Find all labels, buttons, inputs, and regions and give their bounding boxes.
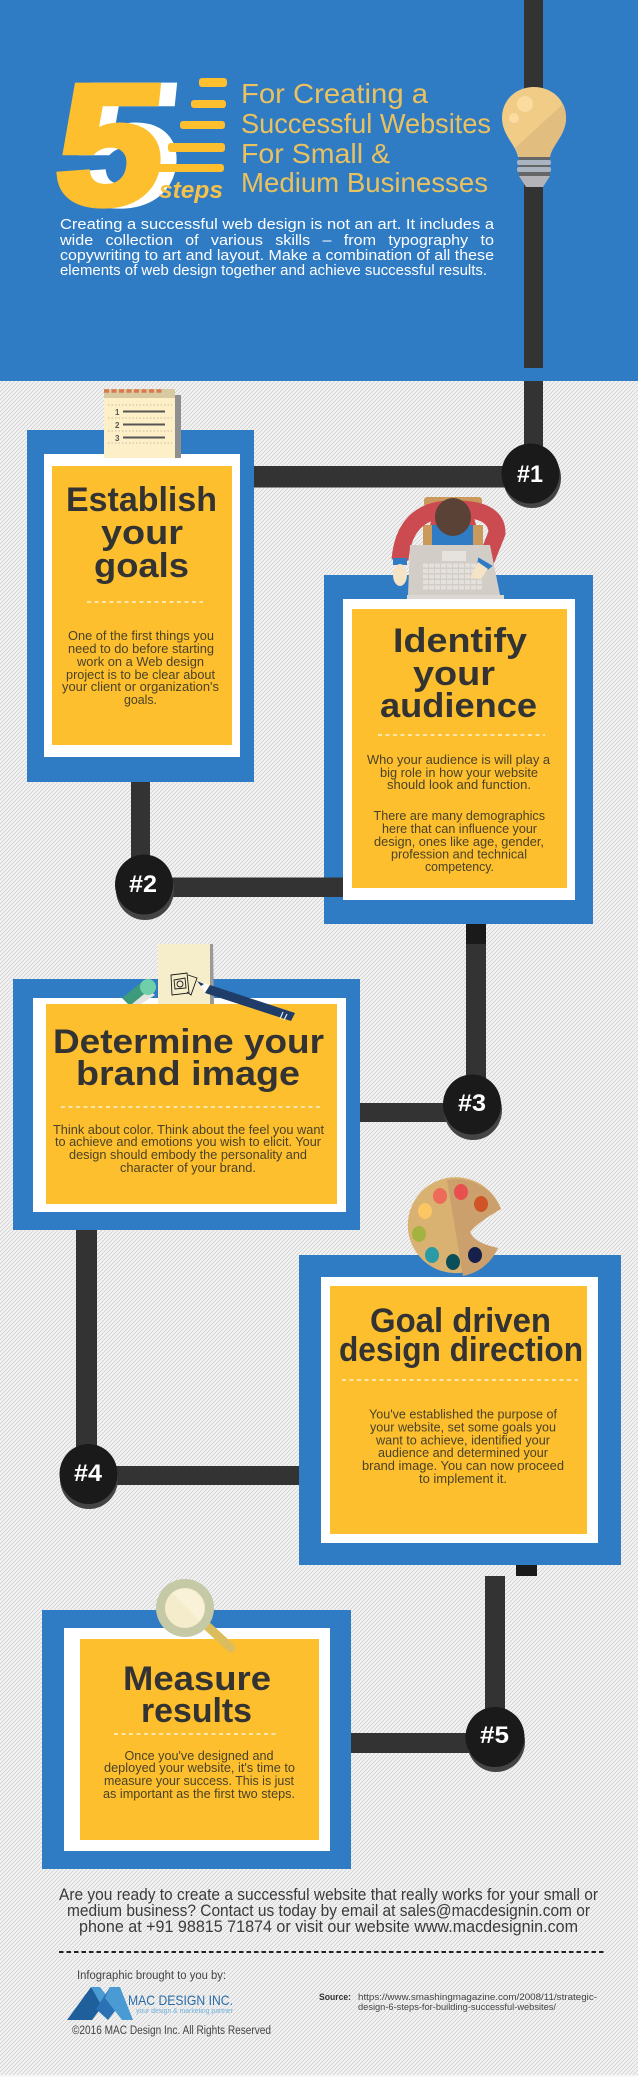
body text: goals. <box>124 693 157 707</box>
badge: #3 <box>443 1074 502 1140</box>
body text: big role in how your website <box>380 766 538 780</box>
body text: to achieve and emotions you wish to elicit. Your <box>55 1135 321 1149</box>
body text: your client or organization's <box>62 680 219 694</box>
logo: mac design: MAC DESIGN INC. <box>128 1992 233 2008</box>
body text: want to achieve, identified your <box>375 1434 550 1448</box>
big number 5 steps: steps <box>159 177 223 204</box>
body text: project is to be clear about <box>66 668 216 682</box>
source: Source: <box>319 1992 351 2003</box>
body text: character of your brand. <box>120 1161 256 1175</box>
title: Medium Businesses <box>241 167 488 198</box>
title <box>241 78 491 198</box>
copyright: ©2016 MAC Design Inc. All Rights Reserved <box>72 2025 271 2037</box>
heading: design direction <box>339 1331 583 1369</box>
heading: Establish <box>66 481 217 519</box>
body text: your website, set some goals you <box>370 1420 556 1434</box>
call to action text: Are you ready to create a successful website that really works for your small or <box>59 1886 598 1904</box>
logo: mac design <box>67 1987 234 2020</box>
intro text: wide collection of various skills – from typography to <box>59 233 494 249</box>
heading: Identify <box>393 622 527 660</box>
badge: #2 <box>115 854 174 920</box>
body text: should look and function. <box>387 778 531 792</box>
body text: measure your success. This is just <box>104 1774 295 1788</box>
call to action text: phone at +91 98815 71874 or visit our website www.macdesignin.com <box>79 1918 578 1936</box>
connector: step 5 <box>351 1565 537 1753</box>
source: design-6-steps-for-building-successful-websites/ <box>358 2002 556 2013</box>
heading <box>123 1660 271 1730</box>
body text: One of the first things you <box>68 629 214 643</box>
icon: lightbulb <box>502 87 566 187</box>
body text: There are many demographics <box>374 809 545 823</box>
panel: step 4 goal driven design direction <box>299 1255 621 1565</box>
body text: profession and technical <box>391 848 527 862</box>
title: For Creating a <box>241 78 428 109</box>
connector: step 1 <box>254 381 543 488</box>
intro text <box>59 217 495 279</box>
heading: Goal driven <box>370 1302 551 1340</box>
icon: magnifying glass <box>156 1579 231 1648</box>
body text: to implement it. <box>419 1472 507 1486</box>
body text <box>367 753 550 874</box>
icon: paper, eraser and pencil <box>122 944 295 1021</box>
body text: design should embody the personality and <box>69 1148 307 1162</box>
connector: step 4 <box>76 1230 299 1485</box>
badge: #1: #1 <box>517 461 543 488</box>
heading: Measure <box>123 1660 271 1698</box>
body text: work on a Web design <box>76 655 204 669</box>
panel: step 5 measure results <box>42 1610 351 1869</box>
heading: brand image <box>76 1055 300 1093</box>
source: https://www.smashingmagazine.com/2008/11/strategic- <box>358 1992 597 2003</box>
icon: notepad checklist: 3 <box>115 434 120 443</box>
body text: You've established the purpose of <box>369 1408 558 1422</box>
body text <box>103 1749 295 1801</box>
heading: Determine your <box>53 1023 324 1061</box>
body text: here that can influence your <box>382 822 537 836</box>
panel: step 1 establish your goals <box>27 430 254 782</box>
heading: your <box>413 655 495 693</box>
heading <box>339 1302 583 1369</box>
call to action text <box>59 1886 598 1936</box>
heading <box>66 481 217 585</box>
heading: your <box>101 514 183 552</box>
credit: brought to you by: Infographic brought to you by: <box>77 1970 226 1982</box>
heading: audience <box>380 687 537 725</box>
body text <box>362 1408 564 1486</box>
panel: header <box>0 0 638 381</box>
body text <box>53 1123 325 1175</box>
title: For Small & <box>241 138 390 169</box>
body text: competency. <box>425 860 494 874</box>
big number 5 steps: 5 <box>63 48 191 241</box>
icon: pictures sketch <box>171 973 197 995</box>
heading: goals <box>94 547 189 585</box>
big number 5 steps: 5 <box>47 48 175 241</box>
body text: Once you've designed and <box>124 1749 274 1763</box>
call to action text: medium business? Contact us today by email at sales@macdesignin.com or <box>67 1902 590 1920</box>
panel: step 3 determine your brand image <box>13 979 360 1230</box>
title: Successful Websites <box>241 108 491 139</box>
icon: notepad checklist: 1 <box>115 408 120 417</box>
badge: #3: #3 <box>458 1090 486 1117</box>
heading: results <box>141 1692 252 1730</box>
connector: step 3 <box>360 924 486 1122</box>
icon: notepad checklist <box>104 389 181 458</box>
badge: #4: #4 <box>74 1460 103 1487</box>
body text <box>62 629 219 707</box>
body text: design, ones like age, gender, <box>374 835 544 849</box>
heading <box>380 622 537 725</box>
badge: #4 <box>60 1444 118 1509</box>
panel: step 2 identify your audience <box>324 575 593 924</box>
badge: #5: #5 <box>480 1722 509 1749</box>
body text: as important as the first two steps. <box>103 1787 295 1801</box>
body text: audience and determined your <box>378 1446 548 1460</box>
intro text: Creating a successful web design is not an art. It includes a <box>60 217 495 233</box>
badge: #5 <box>466 1707 525 1772</box>
heading <box>53 1023 324 1093</box>
source <box>319 1992 597 2013</box>
intro text: elements of web design together and achieve successful results. <box>60 263 487 279</box>
body text: Who your audience is will play a <box>367 753 550 767</box>
body text: Think about color. Think about the feel you want <box>53 1123 325 1137</box>
badge: #2: #2 <box>129 871 157 898</box>
icon: person at laptop <box>393 497 504 599</box>
body text: need to do before starting <box>68 642 214 656</box>
body text: brand image. You can now proceed <box>362 1459 564 1473</box>
icon: notepad checklist: 2 <box>115 421 120 430</box>
logo: mac design: your design & marketing partner <box>136 2008 234 2015</box>
connector: step 2 <box>131 782 343 897</box>
body text: deployed your website, it's time to <box>104 1761 295 1775</box>
badge: #1 <box>502 444 561 508</box>
icon: paint palette <box>408 1177 501 1276</box>
intro text: copywriting to art and layout. Make a combination of all these <box>60 248 494 264</box>
